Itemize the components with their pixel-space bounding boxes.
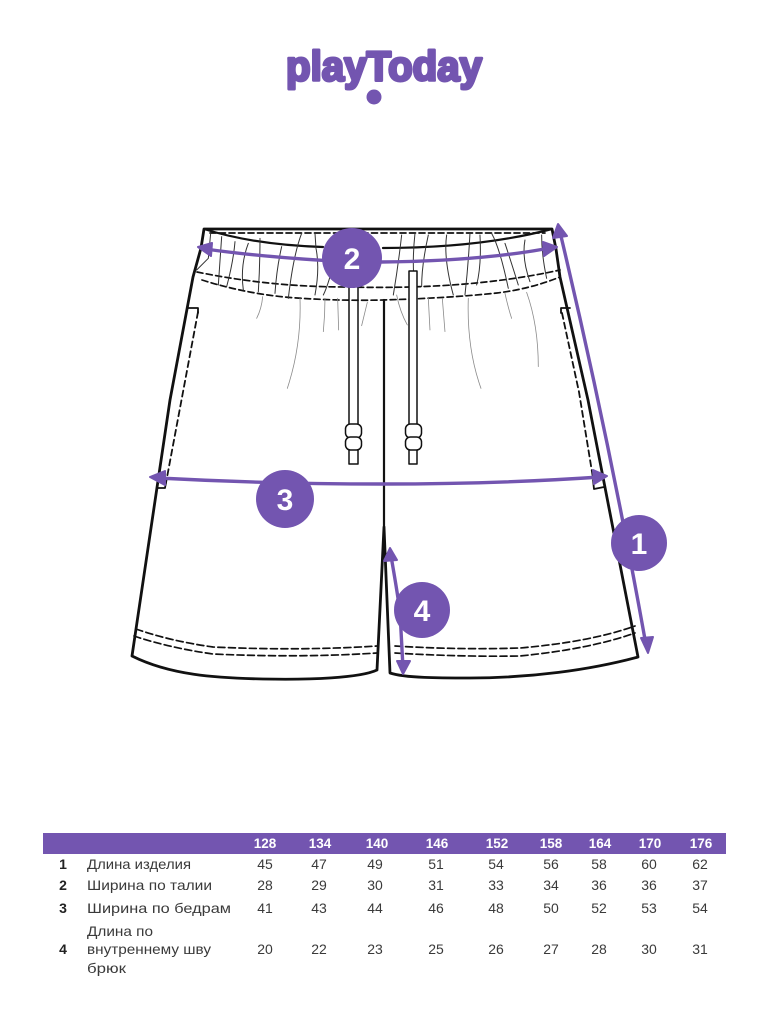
row 1: garment length: 49 (367, 856, 383, 872)
waistband stitching (197, 233, 560, 300)
row 3: hip width: 41 (257, 900, 273, 916)
row 2: waist width: Ширина по талии (87, 877, 212, 893)
row 1: garment length: 51 (428, 856, 444, 872)
measure 4: inseam length: 4 (414, 595, 431, 628)
measure 1: garment length: 1 (631, 528, 647, 561)
centre seam (383, 300, 385, 527)
gathers (197, 233, 547, 388)
table header: 164 (589, 836, 612, 851)
row 4: inseam length: 20 (257, 941, 273, 957)
measure 3: hip width: 3 (277, 484, 293, 517)
row 2: waist width: 36 (591, 877, 607, 893)
row 4: inseam length: брюк (87, 960, 127, 976)
logo: PlayToday: playToday (286, 42, 483, 90)
table header: 128 (254, 836, 277, 851)
table header: 134 (309, 836, 332, 851)
row 4: inseam length (59, 923, 708, 976)
row 4: inseam length: 31 (692, 941, 708, 957)
row 1: garment length (59, 856, 708, 872)
row 3: hip width: 3 (59, 900, 67, 916)
row 1: garment length: 47 (311, 856, 327, 872)
row 4: inseam length: 28 (591, 941, 607, 957)
row 4: inseam length: 23 (367, 941, 383, 957)
row 1: garment length: 1 (59, 856, 67, 872)
row 4: inseam length: внутреннему шву (87, 941, 211, 957)
row 4: inseam length: 30 (641, 941, 657, 957)
row 2: waist width: 31 (428, 877, 444, 893)
row 4: inseam length: Длина по (87, 923, 153, 939)
row 2: waist width: 34 (543, 877, 559, 893)
row 2: waist width: 33 (488, 877, 504, 893)
measure 1: garment length (553, 224, 667, 653)
table header: 158 (540, 836, 563, 851)
pocket right (562, 313, 593, 478)
row 2: waist width (59, 877, 708, 893)
row 2: waist width: 2 (59, 877, 67, 893)
row 2: waist width: 28 (257, 877, 273, 893)
row 1: garment length: 56 (543, 856, 559, 872)
row 1: garment length: 62 (692, 856, 708, 872)
table header: 146 (426, 836, 449, 851)
row 2: waist width: 30 (367, 877, 383, 893)
row 3: hip width: Ширина по бедрам (87, 900, 231, 916)
row 4: inseam length: 27 (543, 941, 559, 957)
measure 4: inseam length (384, 548, 450, 674)
row 4: inseam length: 4 (59, 941, 67, 957)
table header (43, 833, 726, 854)
row 2: waist width: 37 (692, 877, 708, 893)
row 4: inseam length: 22 (311, 941, 327, 957)
drawstring left (346, 287, 362, 464)
row 3: hip width: 53 (641, 900, 657, 916)
row 3: hip width: 48 (488, 900, 504, 916)
row 1: garment length: 58 (591, 856, 607, 872)
measure 2: waist width (198, 228, 557, 288)
row 2: waist width: 29 (311, 877, 327, 893)
waistband inner curve (204, 229, 552, 248)
row 3: hip width: 50 (543, 900, 559, 916)
row 3: hip width (59, 900, 708, 916)
row 4: inseam length: 25 (428, 941, 444, 957)
table header: 152 (486, 836, 508, 851)
measure 2: waist width: 2 (344, 243, 360, 276)
row 3: hip width: 54 (692, 900, 708, 916)
row 3: hip width: 44 (367, 900, 383, 916)
row 3: hip width: 43 (311, 900, 327, 916)
drawstring right (406, 271, 422, 464)
garment: shorts line drawing (132, 229, 638, 679)
row 1: garment length: 60 (641, 856, 657, 872)
row 2: waist width: 36 (641, 877, 657, 893)
row 3: hip width: 46 (428, 900, 444, 916)
row 1: garment length: Длина изделия (87, 856, 191, 872)
row 4: inseam length: 26 (488, 941, 504, 957)
hem stitching (134, 626, 635, 656)
size table (43, 833, 726, 976)
table header: 170 (639, 836, 661, 851)
table header: 176 (690, 836, 713, 851)
table header: 140 (366, 836, 388, 851)
row 1: garment length: 54 (488, 856, 504, 872)
row 3: hip width: 52 (591, 900, 607, 916)
pocket left (165, 312, 198, 488)
shorts outline (132, 229, 638, 679)
row 1: garment length: 45 (257, 856, 273, 872)
measure 3: hip width (150, 470, 607, 528)
